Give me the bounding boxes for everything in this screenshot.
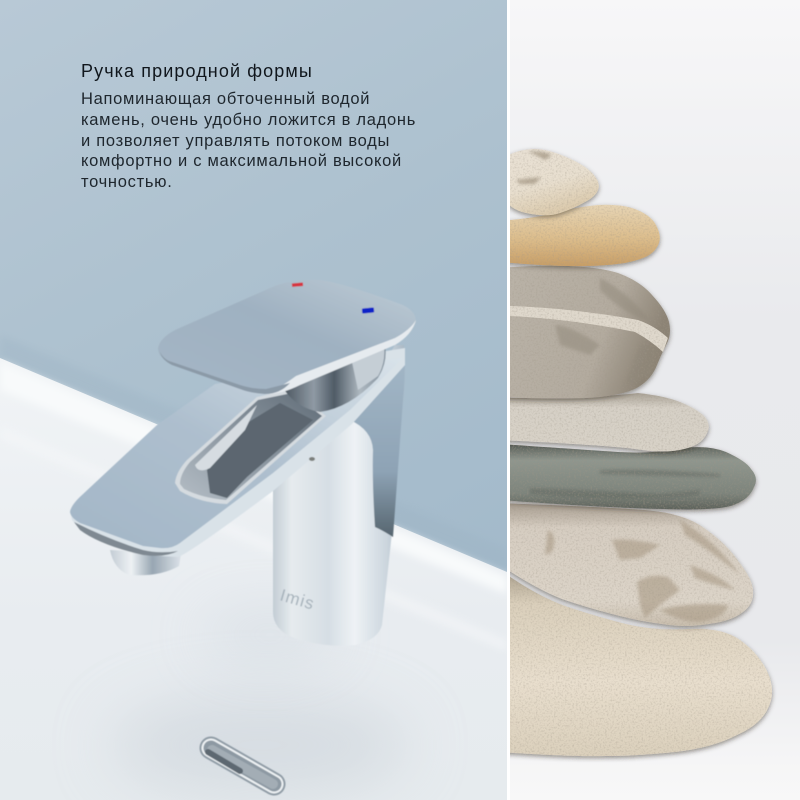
panel: bathroom wall — [0, 0, 507, 800]
stone 3 dark patches — [556, 279, 640, 354]
stone 5: dark grey slab — [500, 444, 756, 509]
spout recess rim — [175, 389, 326, 504]
stone 3 band — [510, 306, 668, 352]
spout lip — [70, 348, 405, 557]
cold marker — [362, 307, 374, 314]
stone 6: patterned — [500, 503, 753, 626]
handle stem — [283, 345, 386, 412]
faucet body — [273, 345, 405, 646]
heading: Ручка природной формы — [81, 61, 313, 81]
spout underside reflection — [74, 522, 178, 556]
panel: white washbasin — [0, 335, 507, 800]
body side reflection — [350, 350, 405, 537]
stone 3: grey with white band — [500, 266, 670, 398]
stone 6 patches — [545, 520, 740, 622]
stones with grain texture — [500, 149, 772, 756]
illustration: chrome faucet — [70, 280, 416, 646]
text block: description: Напоминающая обточенный водой — [81, 90, 370, 108]
recess highlight — [195, 405, 257, 470]
stone 1 mark — [516, 151, 552, 184]
stone 7: bottom cream — [500, 570, 772, 756]
stone 5 streaks — [530, 470, 720, 498]
recess dark reflection — [207, 403, 313, 498]
spout recess — [180, 393, 322, 500]
text block: description: точностью. — [81, 173, 173, 191]
stone 1: pale top — [500, 149, 599, 215]
panel: stones background — [510, 0, 800, 800]
small hole — [309, 457, 315, 461]
icon: drain overflow — [208, 748, 274, 784]
faucet aerator — [110, 550, 181, 575]
text block: description — [81, 90, 416, 191]
stone 4: light flat — [500, 393, 709, 452]
spout top surface — [70, 358, 403, 548]
handle lower chrome edge — [265, 320, 416, 394]
faucet handle — [158, 280, 416, 393]
text block: description: и позволяет управлять потоком воды — [81, 132, 390, 150]
illustration: stacked stones — [500, 149, 772, 756]
stone 2: amber — [500, 205, 660, 266]
text block: description: комфортно и с максимальной высокой — [81, 152, 402, 170]
hot marker — [292, 282, 303, 287]
brand mark: Imis — [278, 586, 317, 614]
text block: description: камень, очень удобно ложится в ладонь — [81, 111, 416, 129]
